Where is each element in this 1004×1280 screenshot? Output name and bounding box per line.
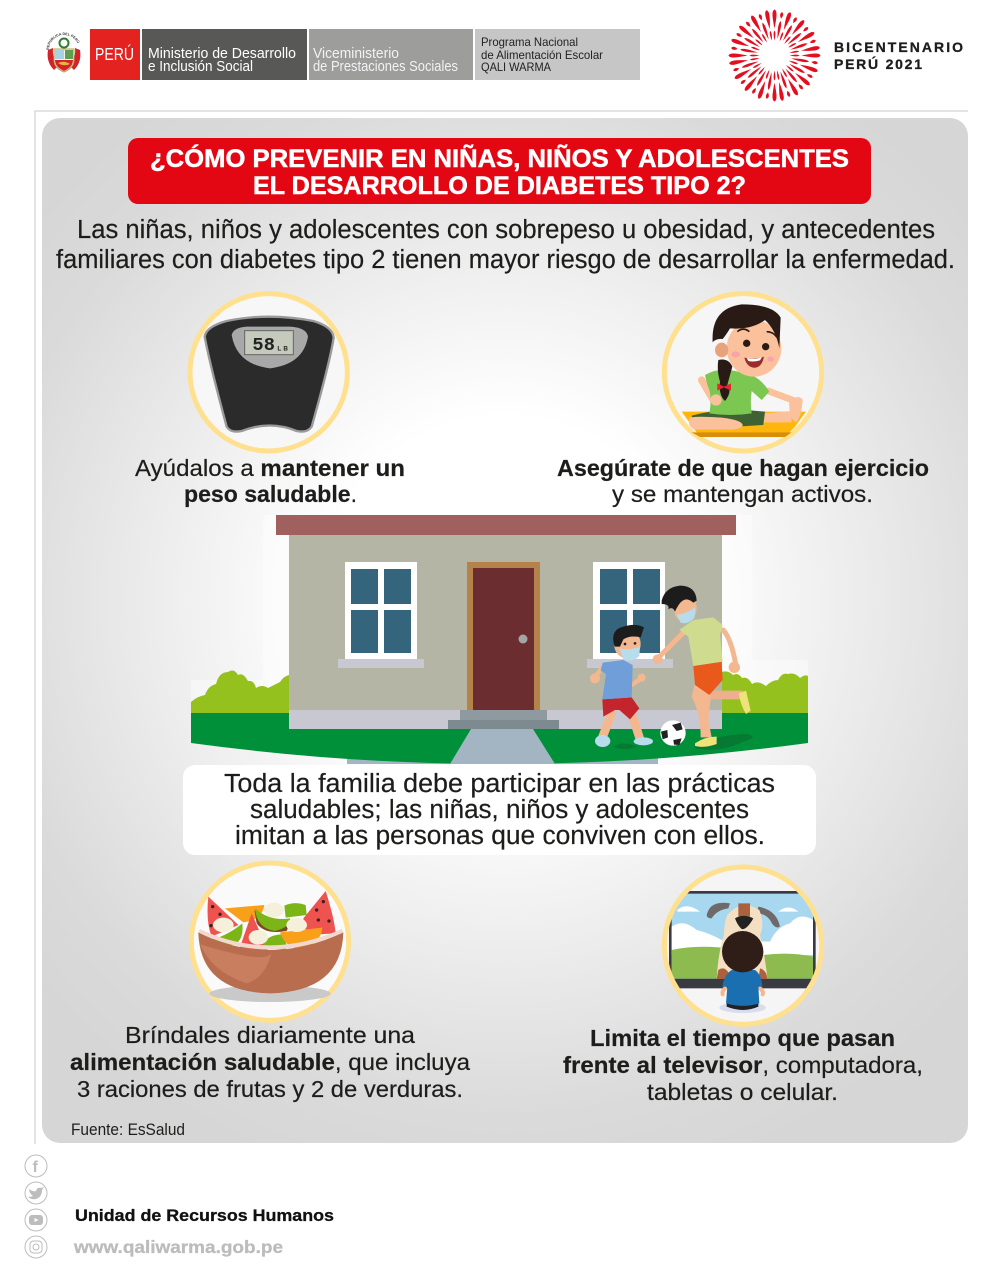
older child [653, 586, 751, 747]
text: healthy weight [135, 455, 405, 507]
text: healthy weight: Ayúdalos a mantener un [135, 455, 405, 481]
source: Fuente: EsSalud [71, 1121, 185, 1139]
logo: Bicentenario Perú 2021 [728, 10, 963, 102]
callout: family message: Toda la familia debe participar en las prácticas [224, 770, 775, 798]
header logo strip [46, 29, 640, 80]
title banner [128, 138, 871, 204]
path band [347, 752, 658, 764]
icon: girl exercising [664, 294, 822, 451]
logo block: Qali Warma: Programa Nacional [481, 35, 578, 49]
children and ball [590, 586, 753, 750]
logo: Bicentenario Perú 2021: BICENTENARIO [834, 39, 963, 55]
logo block: Perú: PERÚ [95, 43, 134, 64]
text: screen time: tabletas o celular. [647, 1079, 838, 1105]
text: healthy food [70, 1022, 470, 1102]
text: screen time: Limita el tiempo que pasan [590, 1025, 895, 1051]
logo block: Viceministerio: Viceministerio [313, 46, 399, 62]
icon: child watching television [664, 867, 822, 1024]
callout: family message: saludables; las niñas, niños y adolescentes [250, 796, 749, 824]
footer text: Unidad de Recursos Humanos [75, 1206, 334, 1225]
logo block: Qali Warma: QALI WARMA [481, 60, 551, 74]
icon: twitter [25, 1182, 47, 1204]
social icons [25, 1155, 47, 1258]
left window [338, 562, 424, 668]
logo block: Ministerio: Ministerio de Desarrollo [148, 46, 296, 62]
icon: bathroom scale: 58 [252, 334, 275, 356]
door [467, 562, 540, 710]
text: healthy food: 3 raciones de frutas y 2 de verduras. [77, 1076, 463, 1102]
text: exercise: Asegúrate de que hagan ejercicio [557, 455, 929, 481]
title banner: EL DESARROLLO DE DIABETES TIPO 2? [253, 172, 746, 200]
text: healthy food: alimentación saludable , que incluya [70, 1049, 470, 1075]
logo: Bicentenario Perú 2021: PERÚ 2021 [834, 55, 922, 72]
lawn [191, 713, 808, 764]
intro text: familiares con diabetes tipo 2 tienen mayor riesgo de desarrollar la enfermedad. [56, 246, 955, 274]
logo block: Ministerio: e Inclusión Social [148, 59, 253, 75]
icon: fruit bowl [191, 863, 349, 1020]
title banner: ¿CÓMO PREVENIR EN NIÑAS, NIÑOS Y ADOLESCENTES [150, 143, 849, 173]
text: screen time [563, 1025, 923, 1105]
icon: bathroom scale: LB [277, 345, 288, 352]
logo block: Viceministerio [309, 29, 473, 80]
callout: family message [183, 765, 816, 855]
text: healthy food: Bríndales diariamente una [125, 1022, 415, 1048]
icon: facebook: f [32, 1159, 38, 1176]
icon: youtube [25, 1209, 47, 1231]
text: screen time: frente al televisor , computadora, [563, 1052, 923, 1078]
text: healthy weight: peso saludable. [184, 481, 357, 507]
right window [587, 562, 673, 668]
logo block: Perú [90, 29, 140, 80]
icon: national emblem of Peru: REPÚBLICA DEL PERÚ [46, 32, 80, 50]
icon: instagram [25, 1236, 47, 1258]
logo block: Qali Warma: de Alimentación Escolar [481, 48, 603, 62]
younger child [590, 625, 653, 747]
steps and path [448, 710, 559, 764]
panel: main content [42, 118, 968, 1143]
icon: bathroom scale [190, 294, 347, 451]
footer text [73, 1206, 334, 1257]
logo block: Viceministerio: de Prestaciones Sociales [313, 59, 458, 75]
text: exercise: y se mantengan activos. [612, 481, 873, 507]
bushes [191, 671, 808, 713]
icon: red sunburst [728, 10, 820, 102]
wall [289, 535, 722, 711]
icon: national emblem of Peru [46, 32, 80, 72]
illustration: house with children playing [191, 515, 808, 764]
logo block: Ministerio [142, 29, 307, 80]
text: exercise [557, 455, 929, 507]
soccer ball [660, 720, 686, 746]
intro text: Las niñas, niños y adolescentes con sobrepeso u obesidad, y antecedentes [77, 216, 935, 244]
roof [276, 515, 736, 535]
logo block: Qali Warma [475, 29, 640, 80]
intro text [56, 216, 955, 274]
callout: family message: imitan a las personas que conviven con ellos. [235, 822, 765, 850]
footer text: www.qaliwarma.gob.pe [73, 1237, 283, 1257]
